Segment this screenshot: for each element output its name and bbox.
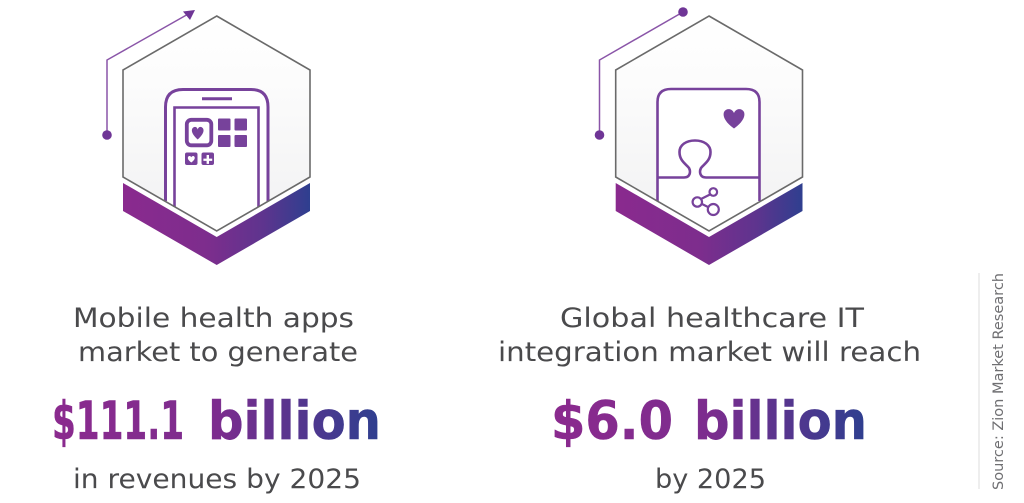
figure: $6.0 billion: $6.0 [551, 391, 673, 452]
puzzle piece [658, 89, 760, 231]
figure: $111.1 billion: $111.1 [52, 391, 184, 452]
figure: $6.0 billion [551, 391, 867, 452]
hexagon background [616, 16, 802, 231]
gradient band [123, 183, 310, 265]
figure: $111.1 billion [52, 391, 381, 452]
text block: left description: market to generate [78, 337, 358, 368]
text: in revenues by 2025: in revenues by 2025 [73, 464, 361, 495]
text block: right description: integration market will reach [498, 337, 921, 368]
connector line [595, 7, 688, 140]
text block: right description: Global healthcare IT [560, 303, 865, 334]
icon: healthcare IT integration hexagon [595, 7, 802, 265]
gradient band [616, 183, 802, 265]
hexagon outline [123, 16, 310, 231]
share icon [693, 188, 719, 215]
source note: Source: Zion Market Research [991, 273, 1007, 490]
hexagon outline [616, 16, 802, 231]
hexagon background [123, 16, 310, 231]
text: by 2025: by 2025 [655, 464, 766, 495]
arrow line [102, 10, 195, 140]
figure: $6.0 billion: billion [694, 391, 867, 452]
figure: $111.1 billion: billion [208, 391, 381, 452]
text block: left description: Mobile health apps [73, 303, 354, 334]
text block: left description [73, 303, 358, 368]
text block: right description [498, 303, 921, 368]
phone [166, 90, 268, 231]
icon: mobile health app hexagon [102, 10, 310, 265]
heart icon [724, 109, 744, 128]
